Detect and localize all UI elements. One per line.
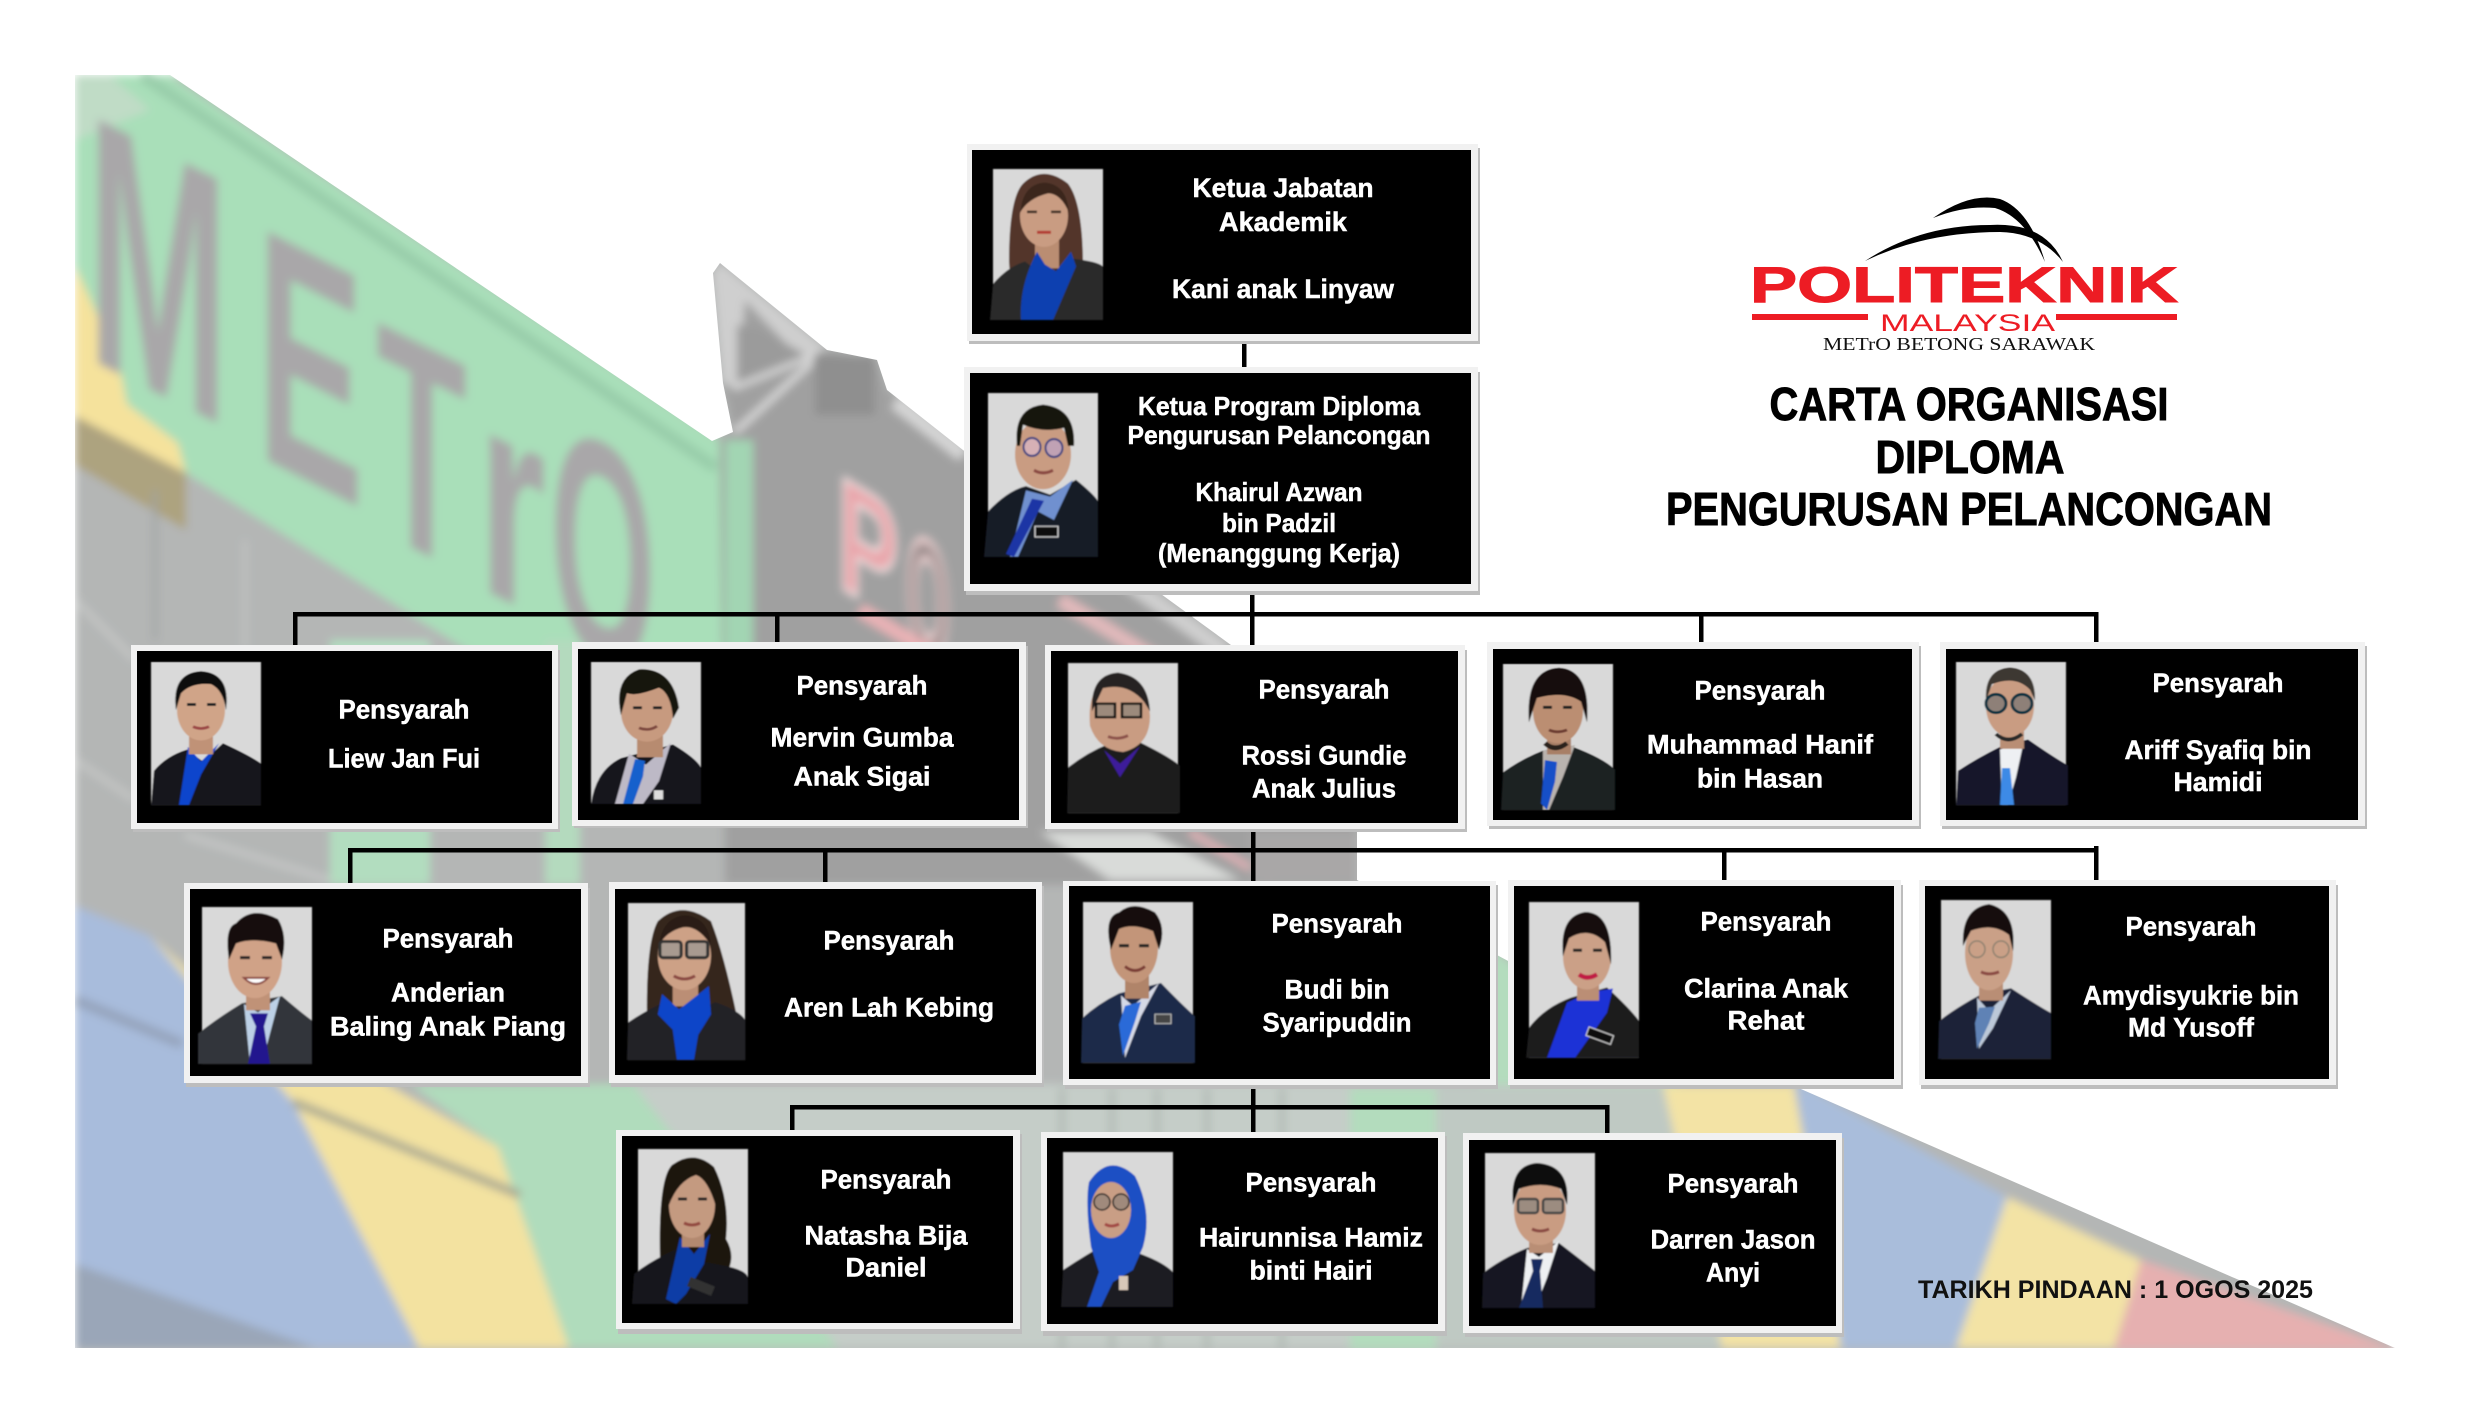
text: Ketua Jabatan: Akademik bbox=[1219, 207, 1348, 237]
logo: Politeknik Malaysia: METrO BETONG SARAWAK bbox=[1823, 334, 2095, 354]
photo: Hairunnisa bbox=[1061, 1152, 1173, 1307]
text: Anderian: Anderian bbox=[391, 978, 505, 1008]
photo: Anderian bbox=[198, 907, 312, 1064]
text: Mervin Gumba: Pensyarah bbox=[796, 670, 928, 700]
text: Darren: Pensyarah bbox=[1668, 1168, 1798, 1198]
text: Clarina: Clarina Anak bbox=[1684, 974, 1849, 1004]
text: Clarina: Pensyarah bbox=[1700, 906, 1832, 936]
text: Natasha: Pensyarah bbox=[820, 1164, 952, 1194]
text: Ketua Program bbox=[1128, 391, 1430, 568]
title: PENGURUSAN PELANCONGAN bbox=[1666, 483, 2272, 535]
text: Ketua Jabatan: Kani anak Linyaw bbox=[1172, 274, 1395, 304]
photo: Darren bbox=[1482, 1153, 1595, 1308]
photo: Kani anak Linyaw bbox=[990, 169, 1103, 320]
text: Natasha bbox=[804, 1164, 968, 1282]
panel: Hairunnisa Hamiz binti Hairi bbox=[1041, 1132, 1447, 1336]
background photo: METrO building: O bbox=[906, 495, 950, 700]
text: Mervin Gumba: Anak Sigai bbox=[794, 762, 930, 792]
text: Hairunnisa: Pensyarah bbox=[1246, 1168, 1376, 1198]
text: Budi bin: Pensyarah bbox=[1272, 908, 1402, 938]
text: Natasha: Daniel bbox=[846, 1252, 926, 1282]
text: Amydisyukrie: Md Yusoff bbox=[2128, 1012, 2255, 1042]
text: Aren Lah Kebing: Aren Lah Kebing bbox=[784, 992, 994, 1022]
text: Ariff Syafiq bbox=[2124, 668, 2312, 797]
background photo: METrO building: O bbox=[550, 351, 656, 751]
panel: Amydisyukrie bin Md Yusoff bbox=[1919, 880, 2338, 1089]
text: Hairunnisa: binti Hairi bbox=[1250, 1256, 1372, 1286]
text: Anderian: Baling Anak Piang bbox=[330, 1012, 566, 1042]
panel: Budi bin Syaripuddin bbox=[1063, 881, 1498, 1089]
revision date: TARIKH PINDAAN : 1 OGOS 2025 bbox=[1918, 1276, 2313, 1304]
panel: Darren Jason Anyi bbox=[1463, 1133, 1844, 1337]
title bbox=[1666, 378, 2272, 535]
text: Muhammad Hanif: bin Hasan bbox=[1697, 764, 1823, 794]
background photo: METrO building: T bbox=[376, 256, 467, 640]
text: Ariff Syafiq: Pensyarah bbox=[2152, 668, 2284, 698]
panel: Ketua Jabatan Akademik bbox=[967, 144, 1480, 344]
text: Liew Jan Fui: Pensyarah bbox=[338, 694, 470, 724]
text: Natasha: Natasha Bija bbox=[804, 1220, 968, 1250]
text: Ketua Jabatan: Ketua Jabatan bbox=[1192, 173, 1374, 203]
text: Aren Lah Kebing bbox=[784, 926, 994, 1022]
text: Budi bin: Syaripuddin bbox=[1262, 1008, 1412, 1038]
text: Muhammad Hanif: Pensyarah bbox=[1694, 676, 1826, 706]
panel: Muhammad Hanif bin Hasan bbox=[1487, 642, 1921, 829]
photo: Aren Lah Kebing bbox=[627, 903, 745, 1060]
text: Mervin Gumba: Mervin Gumba bbox=[770, 722, 954, 752]
text: Aren Lah Kebing: Pensyarah bbox=[824, 926, 954, 956]
text: Clarina: Rehat bbox=[1728, 1006, 1805, 1036]
text: Liew Jan Fui: Liew Jan Fui bbox=[328, 744, 480, 774]
panel: Ariff Syafiq bin Hamidi bbox=[1940, 642, 2367, 829]
connector lines bbox=[293, 340, 2098, 1134]
photo: Rossi Gundie bbox=[1067, 663, 1180, 813]
photo: Natasha bbox=[632, 1149, 748, 1304]
panel: Clarina Anak Rehat bbox=[1508, 880, 1903, 1089]
panel: Ketua Program Diploma bbox=[964, 367, 1480, 595]
text: Budi bin: Budi bin bbox=[1284, 974, 1390, 1004]
text: Hairunnisa bbox=[1199, 1168, 1423, 1286]
photo: Amydisyukrie bbox=[1938, 900, 2051, 1059]
title: CARTA ORGANISASI bbox=[1770, 378, 2168, 430]
text: Budi bin bbox=[1262, 908, 1412, 1038]
panel: Natasha Bija Daniel bbox=[616, 1130, 1022, 1334]
photo: Muhammad Hanif bbox=[1501, 664, 1615, 810]
logo: Politeknik Malaysia bbox=[1750, 198, 2178, 354]
title: DIPLOMA bbox=[1876, 431, 2064, 483]
text: Muhammad Hanif bbox=[1647, 676, 1874, 794]
text: Ariff Syafiq: Ariff Syafiq bin bbox=[2124, 735, 2312, 765]
text: Ketua Program: Ketua Program Diploma bbox=[1138, 391, 1421, 421]
text: Rossi Gundie: Rossi Gundie bbox=[1242, 740, 1406, 770]
background photo: METrO building: r bbox=[478, 316, 546, 685]
background photo: METrO building: M bbox=[87, 38, 229, 505]
panel: Anderian Baling Anak Piang bbox=[184, 883, 590, 1087]
photo: Ariff Syafiq bbox=[1956, 662, 2068, 805]
panel: Liew Jan Fui bbox=[131, 645, 560, 832]
text: Mervin Gumba bbox=[770, 670, 954, 792]
text: Rossi Gundie: Anak Julius bbox=[1252, 774, 1396, 804]
text: Darren: Darren Jason bbox=[1650, 1224, 1816, 1254]
logo: Politeknik Malaysia: POLITEKNIK bbox=[1750, 257, 2178, 313]
photo: Khairul Azwan bbox=[984, 393, 1098, 557]
photo: Liew Jan Fui bbox=[151, 662, 261, 805]
background photo: METrO building: P bbox=[838, 440, 898, 656]
text: Ketua Program: (Menanggung Kerja) bbox=[1158, 538, 1400, 568]
text: Anderian bbox=[330, 924, 566, 1042]
text: Rossi Gundie bbox=[1242, 674, 1406, 804]
panel: Aren Lah Kebing bbox=[609, 882, 1044, 1087]
text: Amydisyukrie bbox=[2083, 912, 2299, 1042]
photo: Clarina bbox=[1526, 902, 1639, 1058]
text: Liew Jan Fui bbox=[328, 694, 480, 774]
text: Amydisyukrie: Pensyarah bbox=[2126, 912, 2256, 942]
text: Amydisyukrie: Amydisyukrie bin bbox=[2083, 980, 2299, 1010]
panel: Mervin Gumba Anak Sigai bbox=[572, 642, 1028, 828]
text: Ketua Program: Pengurusan Pelancongan bbox=[1128, 420, 1430, 450]
text: Ketua Jabatan bbox=[1172, 173, 1395, 304]
photo: Mervin Gumba bbox=[591, 662, 701, 804]
text: Anderian: Pensyarah bbox=[382, 924, 514, 954]
text: Darren: Anyi bbox=[1706, 1258, 1760, 1288]
text: Hairunnisa: Hairunnisa Hamiz bbox=[1199, 1222, 1423, 1252]
text: Ketua Program: Khairul Azwan bbox=[1196, 477, 1362, 507]
text: Ariff Syafiq: Hamidi bbox=[2174, 767, 2262, 797]
background photo: METrO building: E bbox=[257, 154, 364, 581]
text: Clarina bbox=[1684, 906, 1849, 1036]
text: Darren bbox=[1650, 1168, 1816, 1288]
text: Muhammad Hanif: Muhammad Hanif bbox=[1647, 730, 1874, 760]
text: Rossi Gundie: Pensyarah bbox=[1258, 674, 1390, 704]
logo: Politeknik Malaysia: MALAYSIA bbox=[1880, 310, 2055, 337]
photo: Budi bin Syaripuddin bbox=[1081, 902, 1195, 1063]
panel: Rossi Gundie Anak Julius bbox=[1045, 645, 1467, 832]
text: Ketua Program: bin Padzil bbox=[1222, 508, 1336, 538]
